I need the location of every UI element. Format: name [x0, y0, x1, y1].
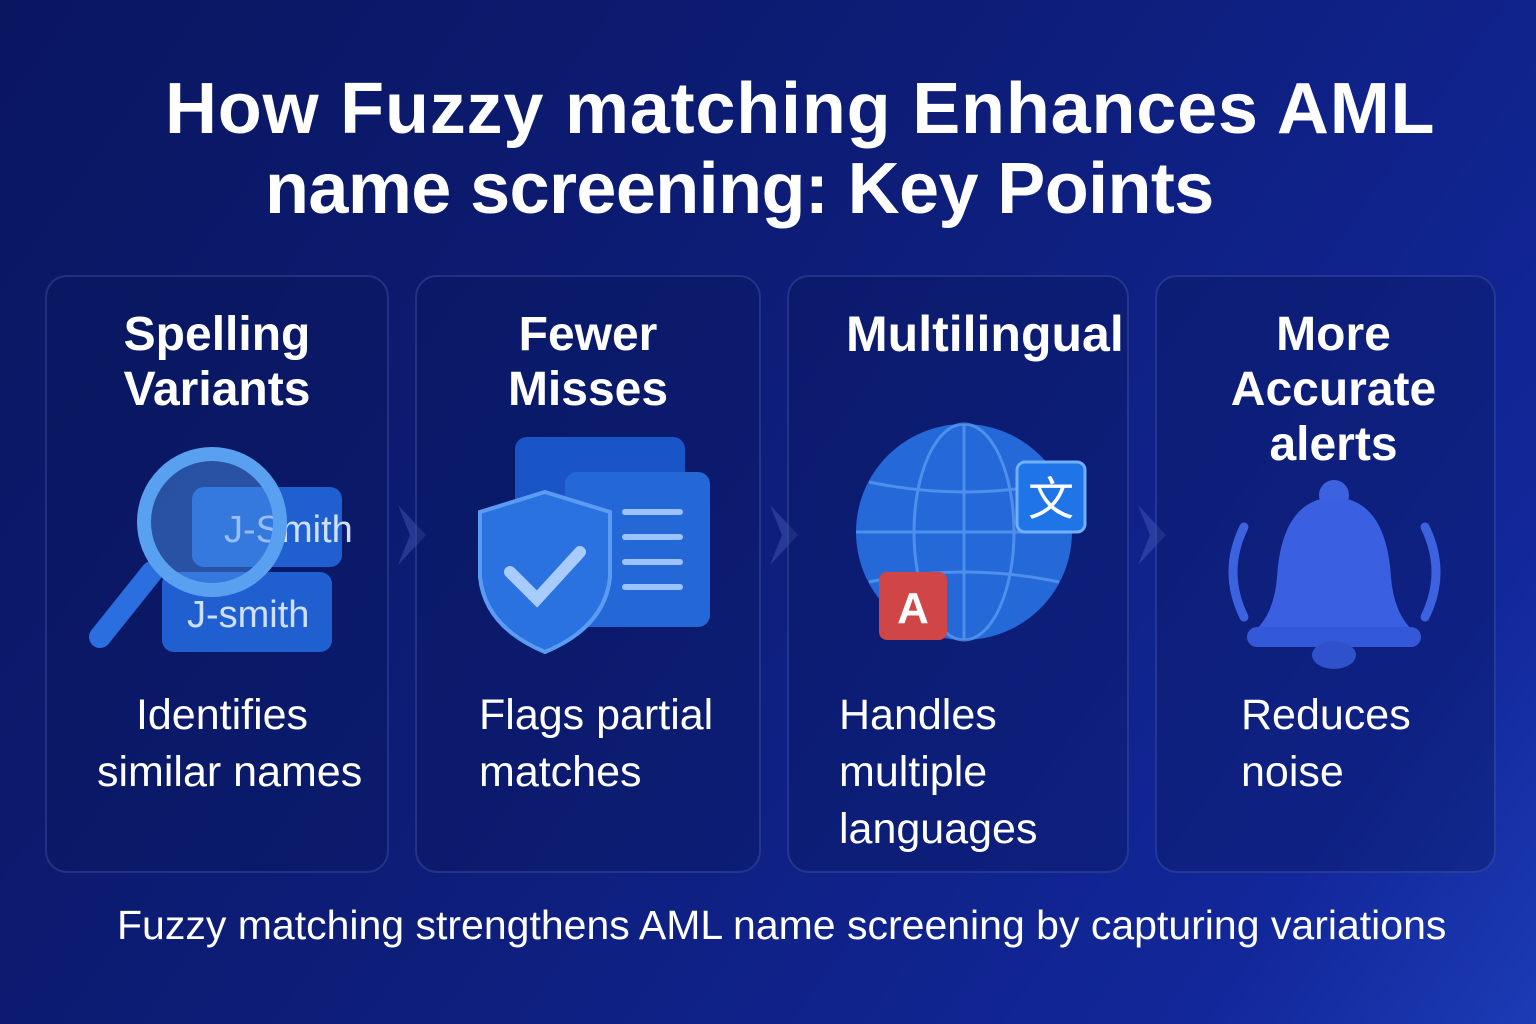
- description: [479, 691, 713, 796]
- heading: spelling variants: Variants: [124, 363, 310, 416]
- arrow: [1138, 506, 1166, 564]
- text: How Fuzzy matching Enhances AML: [165, 69, 1435, 149]
- heading: spelling variants: Spelling: [124, 308, 310, 361]
- icon: magnifier with names: J-smith: [187, 594, 309, 636]
- heading: more accurate alerts: Accurate: [1231, 363, 1436, 416]
- arrow: [398, 506, 426, 564]
- icon: magnifier with names: J-Smith: [224, 509, 353, 551]
- heading: more accurate alerts: [1231, 308, 1436, 471]
- heading: multilingual: Multilingual: [846, 306, 1124, 362]
- icon: magnifier with names: [89, 447, 353, 652]
- description: multiple: [839, 748, 987, 796]
- description: Reduces: [1241, 691, 1411, 739]
- heading: fewer misses: Misses: [508, 363, 668, 416]
- heading: more accurate alerts: alerts: [1269, 418, 1398, 471]
- description: similar names: [97, 748, 362, 796]
- heading: fewer misses: [508, 308, 668, 416]
- heading: fewer misses: Fewer: [519, 308, 657, 361]
- footer caption: Fuzzy matching strengthens AML name screening by capturing variations: [117, 902, 1446, 948]
- title: [165, 69, 1435, 229]
- panel: fewer misses: [415, 275, 761, 873]
- panel: spelling variants: [45, 275, 389, 873]
- panel: more accurate alerts: [1155, 275, 1496, 873]
- icon: globe with language badges: A: [897, 584, 929, 633]
- description: Flags partial: [479, 691, 713, 739]
- description: languages: [839, 805, 1037, 853]
- description: noise: [1241, 748, 1344, 796]
- icon: globe with language badges: 文: [1028, 463, 1074, 529]
- description: [97, 691, 362, 796]
- description: [1241, 691, 1411, 796]
- icon: globe with language badges: [856, 422, 1086, 642]
- description: [839, 691, 1037, 853]
- arrow: [770, 506, 798, 564]
- heading: spelling variants: [124, 308, 310, 416]
- text: name screening: Key Points: [265, 149, 1214, 229]
- description: matches: [479, 748, 642, 796]
- icon: bell: [1228, 480, 1440, 669]
- heading: more accurate alerts: More: [1276, 308, 1391, 361]
- icon: shield and documents: [478, 437, 710, 654]
- description: Handles: [839, 691, 997, 739]
- description: Identifies: [136, 691, 308, 739]
- panel: multilingual: [787, 275, 1129, 873]
